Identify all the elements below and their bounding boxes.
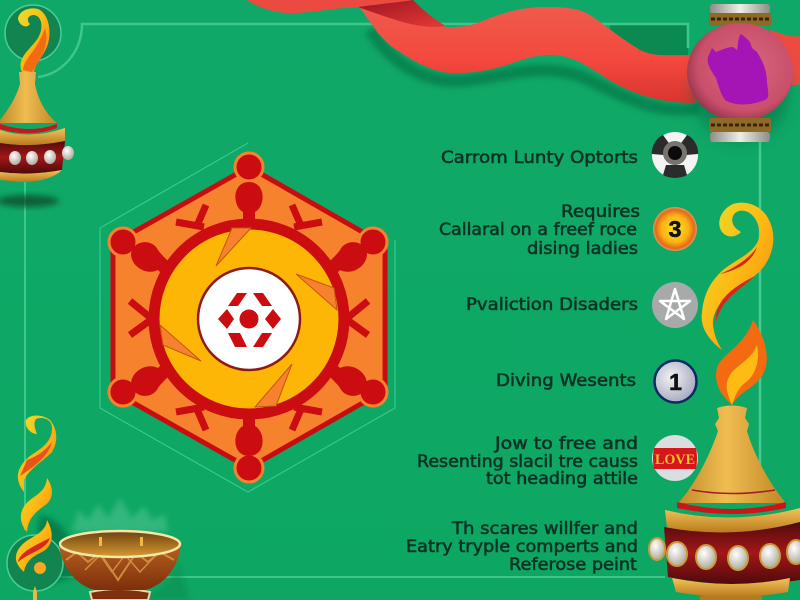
upper swirl — [18, 416, 56, 492]
node circles — [109, 153, 387, 482]
bowl rim — [60, 531, 180, 557]
row 6: text: Th scares willfer and — [451, 519, 638, 539]
icon: number 3 ball — [653, 207, 697, 251]
bulbs — [131, 182, 367, 456]
icon: love badge — [652, 435, 698, 481]
row 5: text: Jow to free and — [494, 434, 638, 454]
yellow ring — [154, 224, 344, 414]
lamp shadow — [0, 195, 59, 207]
swirl flame — [18, 8, 50, 72]
hexagon outline — [100, 143, 395, 492]
row 5: text: Resenting slacil tre causs — [417, 452, 638, 472]
lower flame — [16, 520, 52, 572]
pearls — [9, 146, 74, 165]
row 6: text — [406, 519, 638, 575]
lamp body — [0, 141, 65, 174]
bowl base — [90, 589, 150, 600]
pearls — [649, 538, 800, 570]
lamp flame — [716, 320, 767, 405]
small lamp top left — [0, 5, 74, 207]
lamp rim — [0, 128, 65, 145]
centre pattern — [218, 293, 281, 347]
ribbon — [247, 0, 800, 110]
row 6: text: Referose peint — [509, 555, 637, 575]
bottom left flames — [7, 416, 63, 600]
forked spokes — [130, 205, 368, 430]
lamp body — [664, 522, 800, 584]
icon: love badge: LOVE — [655, 452, 695, 468]
row 2: text: dising ladies — [527, 239, 638, 259]
row 2: text — [439, 202, 640, 259]
row 2: text: Requires — [561, 202, 640, 222]
green disc — [7, 535, 63, 591]
lamp neck and cone — [0, 72, 57, 123]
icon: football ball — [652, 132, 698, 178]
green disc — [5, 5, 61, 61]
bowl body — [59, 545, 181, 590]
bowl shadow — [135, 560, 190, 600]
row 1: text: Carrom Lunty Optorts — [441, 148, 638, 168]
icon: number 1 ball: 1 — [669, 369, 682, 395]
candles — [99, 537, 143, 546]
bowl pattern — [66, 552, 174, 580]
lamp base — [672, 578, 790, 597]
icon: star badge — [652, 282, 698, 328]
lamp base — [0, 170, 62, 182]
lamp neck and cone — [678, 406, 786, 503]
row 2: text: Callaral on a freef roce — [439, 220, 637, 240]
orange shards — [160, 228, 337, 407]
row 3: text: Pvaliction Disaders — [466, 295, 638, 315]
big lamp right — [649, 320, 800, 600]
white centre — [198, 268, 300, 370]
dark corner shading bottom left — [30, 515, 80, 590]
row 6: text: Eatry tryple comperts and — [406, 537, 638, 557]
glow — [72, 498, 168, 532]
dot — [34, 562, 46, 574]
row 5: text: tot heading attile — [486, 469, 638, 489]
hexagon emblem — [100, 143, 395, 492]
flame swirl right — [702, 203, 773, 350]
hexagon body — [113, 167, 385, 468]
middle flame — [21, 478, 52, 532]
row 5: text — [417, 434, 638, 489]
bowl — [59, 498, 190, 600]
lantern — [687, 4, 793, 142]
row 4: text: Diving Wesents — [496, 371, 636, 391]
drip — [33, 586, 37, 600]
icon: number 1 ball — [654, 360, 696, 402]
lamp rim — [665, 508, 800, 533]
icon: number 3 ball: 3 — [669, 216, 681, 242]
